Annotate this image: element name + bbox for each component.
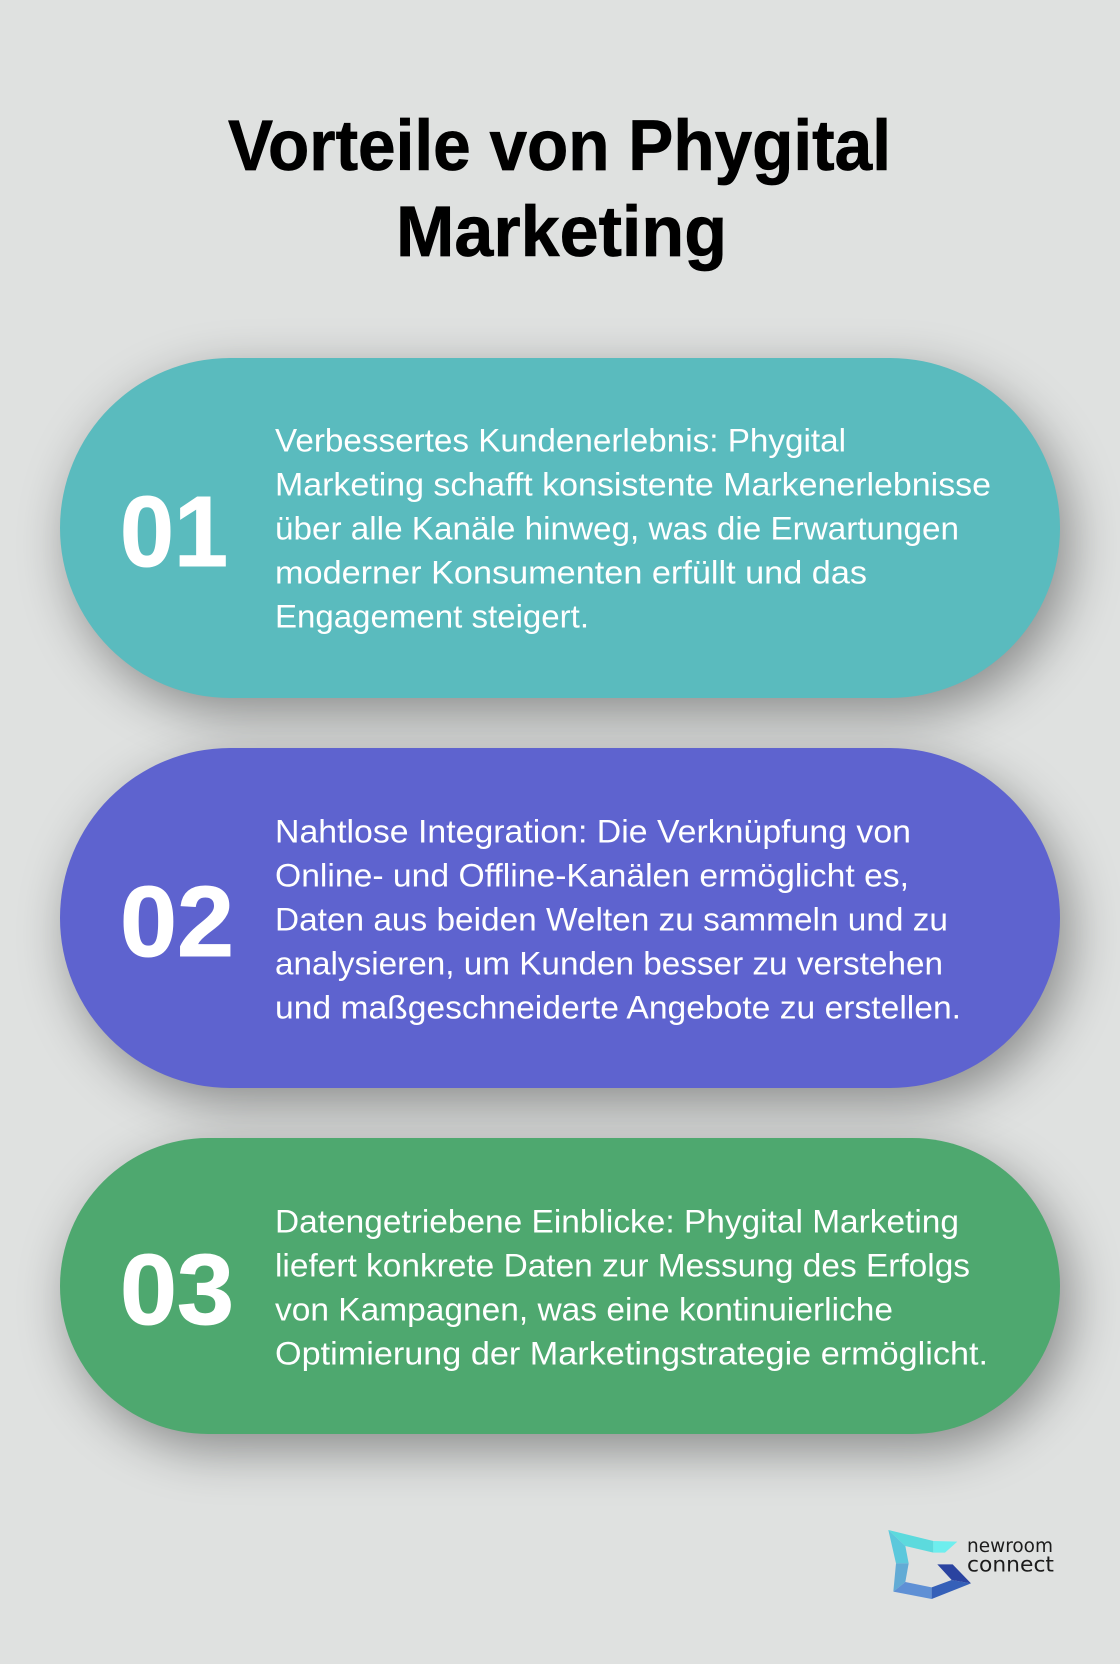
text: Kundenerlebnis: Marketing schafft konsistente Markenerlebnisse	[275, 466, 991, 502]
text: Einblicke: Datengetriebene Einblicke: Phygital Marketing	[275, 1204, 959, 1240]
text: Kundenerlebnis: Verbessertes Kundenerlebnis: Phygital	[275, 422, 846, 458]
wordmark: connect	[967, 1552, 1054, 1576]
text: Integration: Nahtlose Integration: Die Verknüpfung von	[275, 814, 911, 850]
text: Integration: Online- und Offline-Kanälen ermöglicht es,	[275, 858, 909, 894]
text: Kundenerlebnis	[275, 422, 991, 634]
text: Einblicke: Optimierung der Marketingstrategie ermöglicht.	[275, 1336, 988, 1372]
panel: 01 Verbessertes Kundenerlebnis	[60, 358, 1060, 698]
text: Integration: Daten aus beiden Welten zu sammeln und zu	[275, 902, 948, 938]
wordmark	[967, 1535, 1054, 1576]
text: Integration	[275, 814, 961, 1026]
wordmark: newroom	[967, 1535, 1053, 1557]
title: Marketing	[396, 193, 727, 272]
text: Einblicke: von Kampagnen, was eine kontinuierliche	[275, 1292, 893, 1328]
number 01: 01	[120, 476, 228, 588]
title: Vorteile von Phygital	[228, 107, 891, 186]
text: Kundenerlebnis: Engagement steigert.	[275, 598, 589, 634]
number 03: 03	[120, 1234, 234, 1346]
logo: newroom connect	[888, 1530, 1054, 1599]
text: Einblicke	[275, 1204, 988, 1372]
text: Kundenerlebnis: über alle Kanäle hinweg, was die Erwartungen	[275, 510, 959, 546]
icon: logo mark	[888, 1530, 971, 1599]
panel: 03 Datengetriebene Einblicke	[60, 1138, 1060, 1434]
title	[228, 107, 891, 272]
number 02: 02	[120, 866, 234, 978]
text: Integration: analysieren, um Kunden besser zu verstehen	[275, 946, 943, 982]
text: Einblicke: liefert konkrete Daten zur Messung des Erfolgs	[275, 1248, 970, 1284]
panel: 02 Nahtlose Integration	[60, 748, 1060, 1088]
text: Integration: und maßgeschneiderte Angebote zu erstellen.	[275, 990, 961, 1026]
text: Kundenerlebnis: moderner Konsumenten erfüllt und das	[275, 554, 867, 590]
